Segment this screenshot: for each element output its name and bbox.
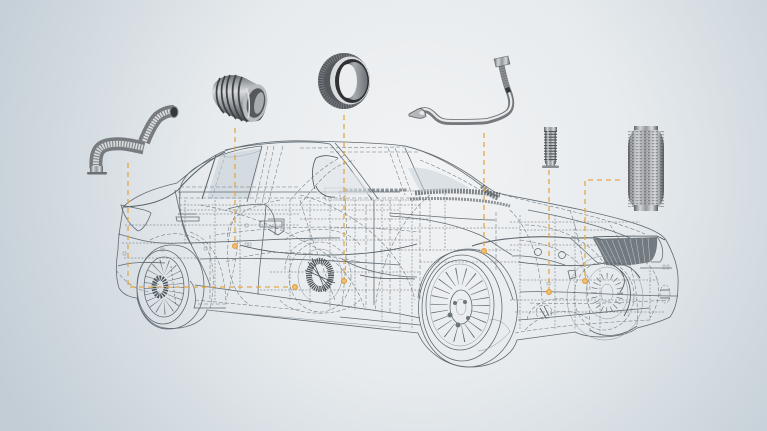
component: ring <box>318 53 370 109</box>
component: metal bellows <box>212 75 271 124</box>
component: braided flex pipe <box>628 126 664 211</box>
dense wireframe lines <box>122 186 665 335</box>
orange connector lines <box>128 115 620 294</box>
far side rear wheel <box>289 242 351 312</box>
cowl and hood lines <box>390 193 645 332</box>
door and beltline lines <box>180 192 420 328</box>
component: small bellows <box>542 127 559 168</box>
far side front wheel <box>567 256 643 340</box>
rear section lines <box>116 190 340 310</box>
connector: ring <box>342 115 346 283</box>
component: bent pipe <box>409 56 511 122</box>
component: corrugated hose <box>87 106 178 174</box>
front wheel <box>418 249 518 367</box>
roof and window lines <box>178 142 482 205</box>
car body silhouette <box>116 141 678 367</box>
rear wheel <box>137 245 204 329</box>
car wireframe <box>116 141 678 367</box>
front grille <box>593 236 672 269</box>
connector: small bellows <box>547 170 551 294</box>
connector: flex pipe <box>583 180 620 283</box>
connector: bellows <box>233 128 237 248</box>
sill lines <box>195 300 420 325</box>
connector: hose to rear pipe <box>128 163 297 289</box>
lower front bumper lines <box>515 285 678 333</box>
connector: oil pipe <box>482 133 486 253</box>
